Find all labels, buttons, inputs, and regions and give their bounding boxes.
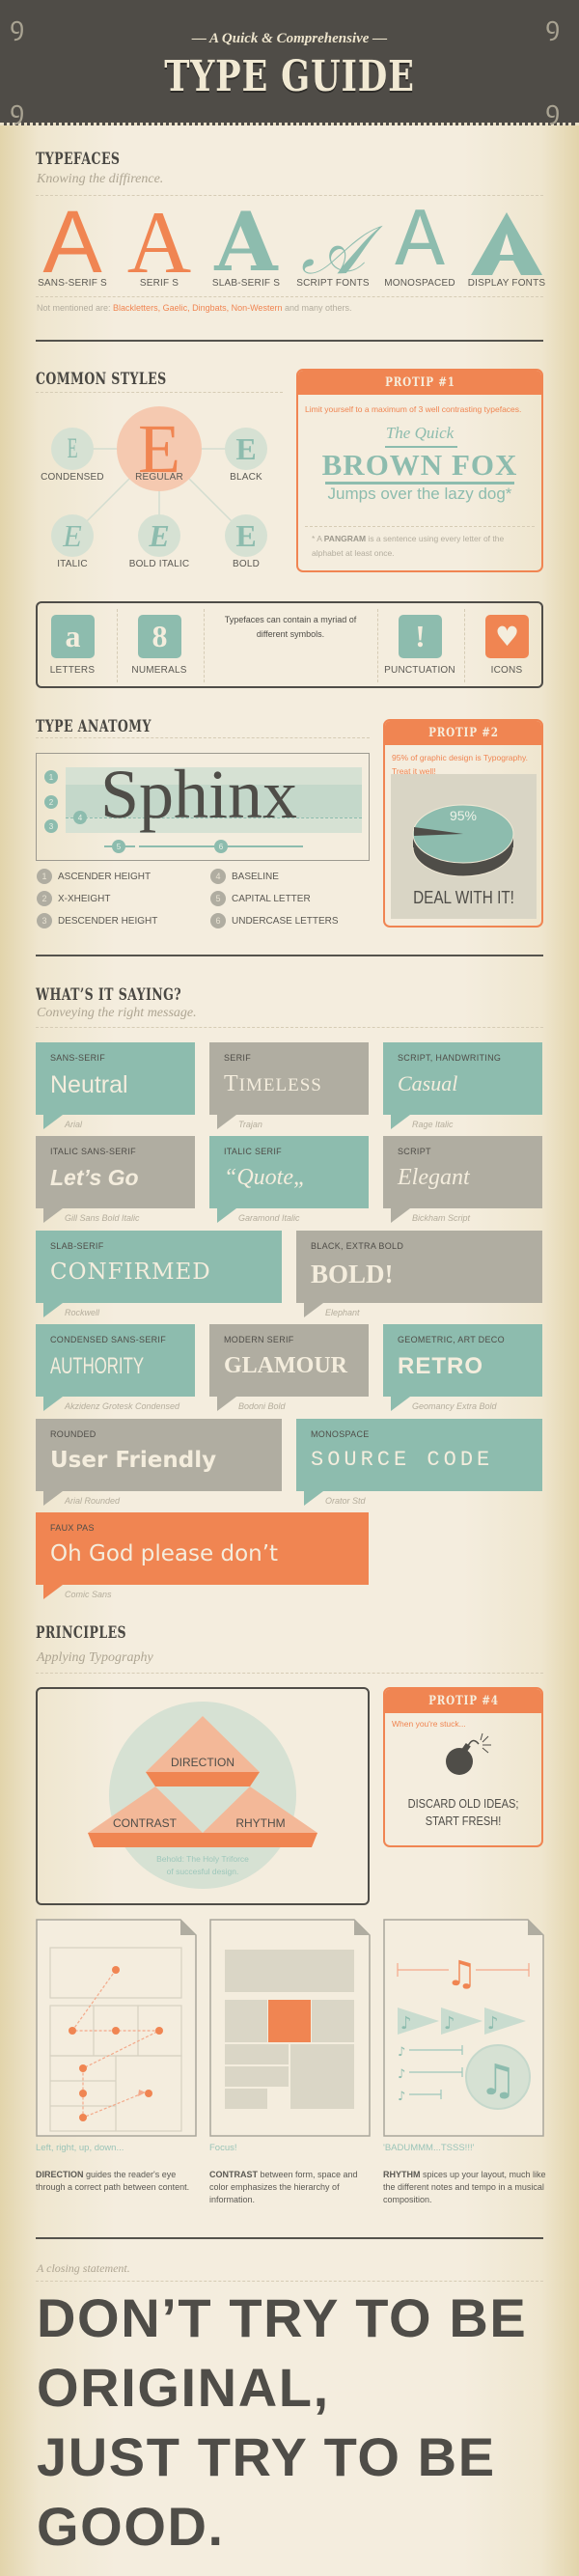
diagram: common styles: BOLD	[233, 559, 260, 569]
circle: bold	[225, 514, 267, 557]
legend: anatomy: 3	[41, 916, 46, 926]
circle: black	[225, 428, 267, 470]
text: Comic Sans	[65, 1590, 112, 1599]
panel: protip 4: START FRESH!	[426, 1814, 501, 1828]
icon: corner ornament top-left: ꝯ	[10, 13, 24, 42]
heading: typefaces: TYPEFACES	[36, 150, 120, 169]
letter: script: 𝒜	[301, 214, 365, 289]
heading: principles: PRINCIPLES	[36, 1623, 126, 1643]
circle: bold italic	[138, 514, 180, 557]
panel: symbols	[36, 601, 543, 688]
typefaces row: SLAB-SERIF S	[212, 278, 280, 289]
closing statement: GOOD.	[37, 2496, 225, 2557]
box: quote: ITALIC SERIF	[224, 1147, 282, 1156]
legend: anatomy: 6	[215, 916, 220, 926]
icon: corner ornament bottom-right: ꝯ	[545, 97, 560, 125]
text: symbols: Typefaces can contain a myriad of different symbols.	[225, 615, 356, 639]
icon: numerals	[138, 615, 181, 658]
icon: bomb	[446, 1733, 491, 1775]
circle: italic: E	[63, 518, 82, 553]
box: faux pas: FAUX PAS	[50, 1523, 95, 1533]
grid: font personality boxes: Bickham Script	[412, 1213, 470, 1223]
grid: font personality boxes: Orator Std	[325, 1496, 366, 1506]
diagram: sphinx anatomy: 2	[49, 798, 54, 807]
subtitle: what's it saying: Conveying the right message.	[37, 1006, 197, 1020]
box: source code: SOURCE CODE	[311, 1448, 493, 1472]
grid: font personality boxes: Rockwell	[65, 1308, 99, 1317]
panel: protip 1: PROTIP #1	[385, 375, 455, 390]
box: neutral: Neutral	[50, 1071, 128, 1098]
captions: Left, right, up, down...	[36, 2143, 124, 2153]
labels: SANS-SERIF S	[38, 278, 107, 289]
panel: symbols: LETTERS	[50, 665, 95, 676]
icon: corner ornament bottom-left: ꝯ	[10, 97, 24, 125]
panel: protip 1: The Quick	[386, 424, 454, 442]
circle: italic	[51, 514, 94, 557]
icon: letters: a	[66, 619, 81, 653]
legend: anatomy: ASCENDER HEIGHT	[58, 872, 151, 882]
grid: font personality boxes: Gill Sans Bold Italic	[65, 1213, 140, 1223]
box: bold: BOLD!	[311, 1260, 394, 1288]
box: elegant: Elegant	[398, 1165, 470, 1190]
card: rhythm: ♪	[398, 2067, 405, 2082]
diagram: sphinx anatomy: 3	[49, 822, 54, 831]
diagram: common styles: REGULAR	[135, 472, 183, 483]
grid: font personality boxes: Elephant	[325, 1308, 360, 1317]
panel: symbols: NUMERALS	[131, 665, 187, 676]
panel: protip 2: 95% of graphic design is Typography. Treat it well!	[392, 753, 528, 776]
diagram: sphinx anatomy	[36, 753, 370, 861]
legend: anatomy: X-XHEIGHT	[58, 894, 110, 904]
diagram: sphinx anatomy: 4	[78, 814, 83, 822]
box: let's go: Let’s Go	[50, 1165, 139, 1190]
box: confirmed	[36, 1231, 282, 1303]
box: glamour: GLAMOUR	[224, 1353, 347, 1378]
box: confirmed: CONFIRMED	[50, 1260, 211, 1285]
box: authority: AUTHORITY	[50, 1353, 144, 1379]
box: casual	[383, 1042, 542, 1115]
box: timeless: SERIF	[224, 1053, 251, 1063]
card: rhythm: ♪	[398, 2045, 405, 2060]
box: source code: MONOSPACE	[311, 1429, 370, 1439]
panel: triforce: Behold: The Holy Triforce	[156, 1854, 249, 1864]
note: not mentioned: Not mentioned are: Blackletters, Gaelic, Dingbats, Non-Western and many others.	[37, 303, 351, 313]
legend: anatomy	[37, 869, 339, 928]
panel: protip 4: When you're stuck...	[392, 1719, 466, 1729]
text: 'BADUMMM...TSSS!!!'	[383, 2143, 474, 2153]
circle: condensed: E	[67, 432, 77, 464]
panel: symbols: ICONS	[491, 665, 522, 676]
header banner	[0, 0, 579, 125]
diagram: common styles: BOLD ITALIC	[129, 559, 189, 569]
chart: pie 95%: 95%	[450, 808, 477, 823]
panel: protip 1: Limit yourself to a maximum of 3 well contrasting typefaces.	[305, 404, 521, 414]
legend: anatomy: 1	[41, 872, 46, 881]
box: let's go: ITALIC SANS-SERIF	[50, 1147, 136, 1156]
grid: font personality boxes: Trajan	[238, 1120, 262, 1129]
circle: regular: E	[138, 410, 180, 487]
chart: pie 95%: DEAL WITH IT!	[413, 888, 514, 907]
circle: bold: E	[235, 518, 257, 553]
legend: anatomy: BASELINE	[232, 872, 279, 882]
box: user friendly	[36, 1419, 282, 1491]
diagram: sphinx anatomy: 5	[117, 843, 122, 851]
grid: font personality boxes: Rage Italic	[412, 1120, 454, 1129]
panel: triforce: RHYTHM	[235, 1816, 286, 1830]
diagram: common styles: CONDENSED	[41, 472, 104, 483]
box: faux pas: Oh God please don’t	[50, 1541, 278, 1566]
box: quote	[209, 1136, 369, 1208]
circle: black: E	[235, 431, 257, 466]
panel: triforce: DIRECTION	[171, 1756, 234, 1769]
legend: anatomy: DESCENDER HEIGHT	[58, 916, 157, 927]
icon: numerals: 8	[152, 619, 168, 653]
closing statement: JUST TRY TO BE	[37, 2426, 496, 2487]
circle: bold italic: E	[149, 518, 170, 553]
box: neutral: SANS-SERIF	[50, 1053, 105, 1063]
box: bold	[296, 1231, 542, 1303]
typefaces row	[38, 193, 545, 291]
diagram: sphinx anatomy: 1	[49, 773, 54, 782]
box: quote: “Quote„	[224, 1165, 306, 1190]
typefaces row: SCRIPT FONTS	[296, 278, 370, 289]
grid: font personality boxes: Arial	[65, 1120, 82, 1129]
box: retro: GEOMETRIC, ART DECO	[398, 1335, 505, 1344]
legend: anatomy: CAPITAL LETTER	[232, 894, 311, 904]
grid: font personality boxes: Akzidenz Grotesk Condensed	[65, 1401, 179, 1411]
panel: protip 2	[383, 719, 543, 928]
panel: symbols: PUNCTUATION	[384, 665, 455, 676]
closing statement	[37, 2287, 527, 2557]
letter: serif: A	[127, 193, 191, 291]
box: faux pas	[36, 1512, 369, 1585]
panel: triforce: CONTRAST	[113, 1816, 178, 1830]
box: user friendly: User Friendly	[50, 1448, 216, 1473]
box: timeless	[209, 1042, 369, 1115]
icon: corner ornament top-right: ꝯ	[545, 13, 560, 42]
letter: sans-serif: A	[42, 193, 102, 291]
closing statement: DON’T TRY TO BE	[37, 2287, 527, 2348]
letter: slab serif: A	[214, 194, 278, 290]
subtitle: typefaces: Knowing the diffirence.	[37, 172, 163, 186]
box: retro	[383, 1324, 542, 1397]
heading: type anatomy: TYPE ANATOMY	[36, 717, 152, 736]
box: confirmed: SLAB-SERIF	[50, 1241, 104, 1251]
diagram: sphinx anatomy: Sphinx	[100, 756, 297, 833]
box: casual: SCRIPT, HANDWRITING	[398, 1053, 501, 1063]
subtitle: principles: Applying Typography	[37, 1650, 153, 1665]
diagram: common styles: BLACK	[230, 472, 262, 483]
subtitle: closing: A closing statement.	[37, 2261, 130, 2275]
icon: letters	[51, 615, 95, 658]
panel: protip 4: PROTIP #4	[428, 1694, 498, 1708]
icon: icons heart	[485, 615, 529, 658]
letter: monospaced: A	[395, 195, 445, 290]
diagram: sphinx anatomy: 6	[219, 843, 224, 851]
text: contrast: CONTRAST between form, space and color emphasizes the hierarchy of information.	[209, 2170, 358, 2204]
legend: anatomy: 2	[41, 894, 46, 903]
box: let's go	[36, 1136, 195, 1208]
panel: triforce	[36, 1687, 370, 1905]
grid: font personality boxes: Arial Rounded	[65, 1496, 120, 1506]
box: user friendly: ROUNDED	[50, 1429, 96, 1439]
panel: protip 1	[296, 369, 543, 572]
panel: protip 1: BROWN FOX	[322, 448, 517, 482]
legend: anatomy: UNDERCASE LETTERS	[232, 916, 339, 927]
box: glamour	[209, 1324, 369, 1397]
typefaces row: DISPLAY FONTS	[468, 278, 545, 289]
text: Focus!	[209, 2143, 237, 2153]
circle: condensed	[51, 428, 94, 470]
legend: anatomy: 4	[215, 872, 220, 881]
box: source code	[296, 1419, 542, 1491]
grid: font personality boxes: Geomancy Extra Bold	[412, 1401, 497, 1411]
box: authority	[36, 1324, 195, 1397]
grid: font personality boxes: Garamond Italic	[238, 1213, 300, 1223]
card: rhythm: ♫	[479, 2056, 517, 2105]
icon: punctuation	[399, 615, 442, 658]
closing statement: ORIGINAL,	[37, 2357, 330, 2418]
grid: font personality boxes: Bodoni Bold	[238, 1401, 286, 1411]
card: rhythm: ♫	[446, 1954, 477, 1994]
icon: icons heart: ♥	[495, 621, 519, 652]
box: elegant	[383, 1136, 542, 1208]
box: casual: Casual	[398, 1071, 457, 1095]
diagram: common styles: ITALIC	[57, 559, 88, 569]
box: authority: CONDENSED SANS-SERIF	[50, 1335, 166, 1344]
panel: protip 1: Jumps over the lazy dog*	[328, 485, 511, 503]
card: direction	[36, 1919, 197, 2137]
box: bold: BLACK, EXTRA BOLD	[311, 1241, 403, 1251]
box: elegant: SCRIPT	[398, 1147, 431, 1156]
typefaces row: SERIF S	[140, 278, 179, 289]
diagram: common styles	[41, 406, 267, 569]
panel: protip 1: * A PANGRAM is a sentence using every letter of the alphabet at least once.	[312, 534, 504, 558]
legend: anatomy: 5	[215, 894, 220, 903]
text: rhythm: RHYTHM spices up your layout, much like the different notes and tempo in a musical composition.	[383, 2170, 546, 2204]
letter: display	[471, 212, 542, 275]
card: rhythm: ♪	[400, 2013, 411, 2034]
box: retro: RETRO	[398, 1353, 483, 1379]
card: rhythm: ♪	[398, 2090, 405, 2104]
panel: protip 4	[383, 1687, 543, 1847]
chart: pie 95%	[391, 774, 537, 919]
header subtitle: — A Quick & Comprehensive —	[192, 31, 387, 46]
typefaces row: MONOSPACED	[384, 278, 455, 289]
panel: triforce: of succesful design.	[167, 1867, 238, 1876]
box: timeless: TIMELESS	[224, 1071, 322, 1096]
circle: regular	[117, 406, 202, 491]
grid: font personality boxes	[36, 1042, 542, 1506]
card: rhythm	[383, 1919, 544, 2137]
heading: common styles: COMMON STYLES	[36, 370, 167, 389]
box: neutral	[36, 1042, 195, 1115]
icon: punctuation: !	[415, 619, 426, 653]
box: glamour: MODERN SERIF	[224, 1335, 294, 1344]
card: contrast	[209, 1919, 371, 2137]
text: direction: DIRECTION guides the reader's eye through a correct path between content.	[36, 2170, 189, 2192]
card: rhythm: ♪	[444, 2013, 455, 2034]
panel: protip 4: DISCARD OLD IDEAS;	[408, 1796, 518, 1811]
panel: protip 2: PROTIP #2	[428, 726, 498, 740]
card: rhythm: ♪	[487, 2013, 498, 2034]
heading: what's it saying: WHAT’S IT SAYING?	[36, 985, 181, 1005]
title: TYPE GUIDE	[164, 52, 415, 101]
